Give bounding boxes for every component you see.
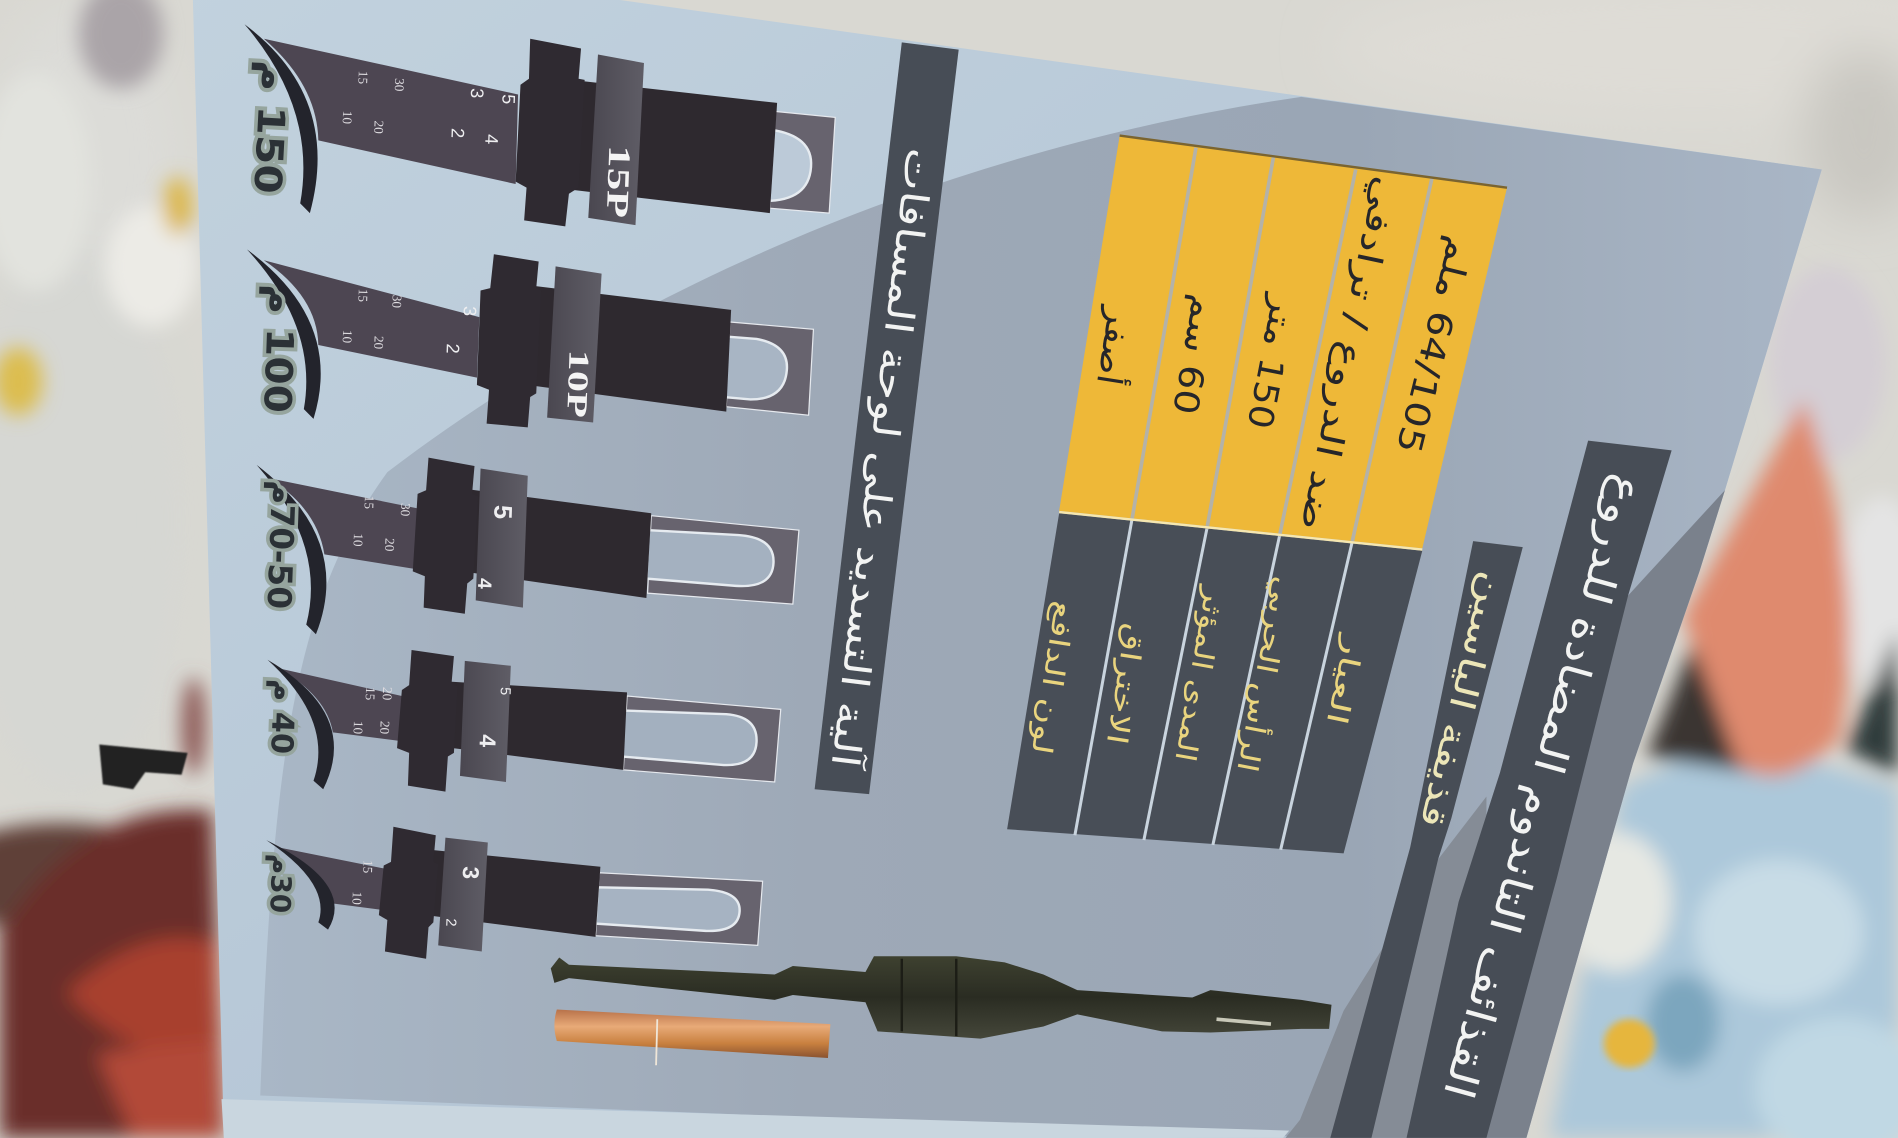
sight gauge 100 m: 100 م [255, 284, 302, 414]
sight gauge 70-50 m: 70-50م [260, 480, 302, 610]
sight gauge 150 m: 5 [498, 94, 519, 105]
panel: sights heading bar: آلية التسديد على لوحة المسافات [822, 146, 942, 772]
sight gauge 100 m: 10P [560, 349, 595, 418]
sight gauge 100 m: 3 [459, 306, 480, 317]
sight gauge 30 m: 3 [458, 866, 484, 880]
sight gauge 150 m: 150 م [245, 60, 295, 195]
sight gauge 40 m: 4 [475, 734, 501, 748]
sight gauge 150 m: 15 [355, 71, 371, 85]
row: penetration: الاختراق [1100, 621, 1151, 747]
icon: copper propellant booster tube [554, 1010, 830, 1065]
row: warhead [1230, 173, 1405, 775]
sight gauge 100 m: 2 [443, 343, 463, 354]
subtitle: shell name: قذيفة الياسين [1412, 568, 1513, 832]
panel: dark title swoosh [1286, 441, 1725, 1138]
sight gauge 150 m: 2 [447, 128, 468, 139]
sight gauge 150 m: 30 [392, 78, 407, 92]
icon: tandem rocket projectile [551, 956, 1332, 1039]
row: color: لون الدافع [1025, 599, 1081, 757]
row: caliber: 64/105 ملم [1388, 233, 1480, 457]
row: color: أصفر [1088, 303, 1143, 388]
sight gauge 70-50 m: 15 [361, 495, 377, 510]
sight gauge 100 m: 15 [355, 288, 371, 303]
sight gauge 30 m: 10 [349, 891, 365, 905]
sight gauge 40 m: 15 [363, 687, 378, 701]
sight gauge 100 m: 10 [340, 330, 355, 344]
sight gauge 70-50 m: 20 [382, 538, 397, 552]
row: warhead: الرأس الحربي [1230, 574, 1302, 775]
sight gauge 100 m [247, 249, 813, 427]
sight gauge 70-50 m: 30 [398, 503, 413, 517]
row: caliber: العيار [1320, 631, 1370, 728]
sight gauge 40 m [263, 650, 781, 792]
row: color [1025, 303, 1143, 757]
sight gauge 30 m: 2 [442, 918, 458, 927]
title: القذائف التاندوم المضادة للدروع [1433, 470, 1653, 1104]
row: effective range: المدى المؤثر [1168, 582, 1231, 764]
sight gauge 40 m: 5 [497, 687, 513, 696]
sight gauge 40 m: 10 [351, 721, 366, 735]
sight gauge 150 m: 15P [600, 145, 637, 218]
sight gauge 40 m: 20 [377, 721, 393, 735]
row: warhead: ضد الدروع / ترادفي [1292, 173, 1405, 534]
sight gauge 150 m: 4 [481, 134, 502, 145]
sight gauge 30 m [263, 827, 763, 959]
sight gauge 150 m: 10 [340, 111, 355, 125]
sight gauge 40 m: 20 [380, 687, 395, 701]
row: effective range: 150 متر [1239, 290, 1303, 432]
row: caliber [1320, 233, 1480, 728]
panel: sights heading bar [815, 42, 959, 794]
row: penetration [1100, 292, 1225, 747]
row: effective range [1168, 290, 1303, 764]
sight gauge 100 m: 20 [371, 336, 387, 350]
sight gauge 150 m: 20 [371, 120, 387, 134]
sight gauge 30 m: 15 [360, 860, 376, 874]
sight gauge 150 m: 3 [467, 88, 487, 99]
sight gauge 70-50 m: 10 [351, 533, 366, 547]
table dark label cells [1007, 513, 1422, 853]
sight gauge 70-50 m [257, 458, 799, 634]
sight gauge 70-50 m: 4 [473, 578, 495, 589]
sight gauge 100 m: 30 [389, 295, 405, 309]
panel: specifications table [1007, 136, 1507, 853]
sight gauge 150 m [245, 24, 835, 226]
table yellow value cells [1059, 136, 1507, 548]
sight gauge 40 m: 40 م [263, 679, 301, 755]
sight gauge 30 m: 30م [263, 854, 298, 914]
row: penetration: 60 سم [1165, 292, 1225, 418]
sight gauge 70-50 m: 5 [488, 504, 517, 520]
